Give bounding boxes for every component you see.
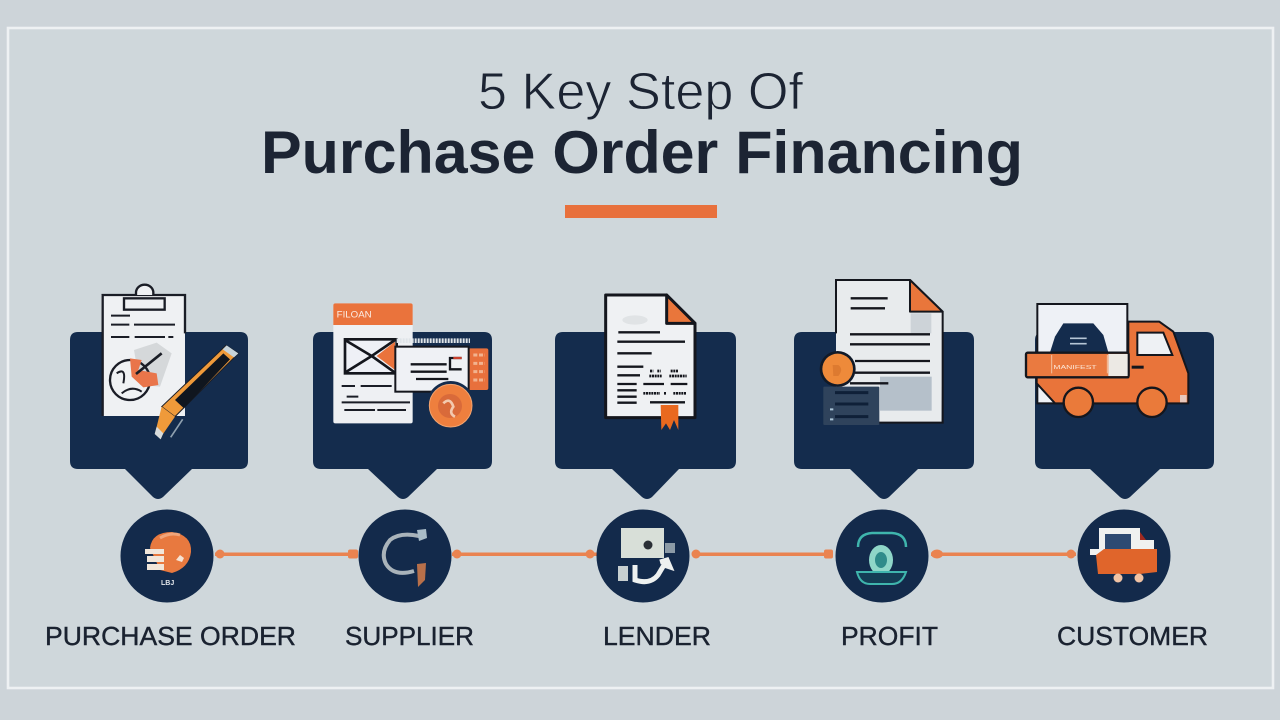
step 1 panel: purchase order (70, 285, 248, 499)
label: customer: CUSTOMER (1057, 621, 1208, 651)
connector line: supplier to lender (452, 550, 597, 558)
connector line: profit to customer (931, 550, 1076, 558)
icon: invoice with envelope and coin (333, 303, 488, 429)
icon: invoice with envelope and coin: FILOAN (337, 310, 372, 320)
icon: signed document with ribbon (606, 295, 695, 430)
callout box 1 (70, 332, 248, 499)
icon: delivery truck (1026, 304, 1188, 417)
callout box 4 (794, 332, 974, 499)
circle icon 5: customer (1078, 510, 1170, 602)
title line: Purchase Order Financing: Purchase Order Financing (261, 119, 1023, 186)
label: lender: LENDER (603, 621, 711, 651)
icon: report with coin (820, 280, 943, 425)
circle icon 1: purchase order: LBJ (161, 580, 174, 587)
title (261, 63, 1023, 186)
callout box 2 (313, 332, 492, 499)
circle icon 1: purchase order (120, 510, 214, 602)
icon: clipboard and pencil (101, 285, 238, 439)
callout box 5 (1035, 332, 1214, 499)
circle icon 2: supplier (358, 510, 452, 602)
icon: delivery truck: MANIFEST (1053, 365, 1097, 371)
connector line: lender to profit (692, 550, 833, 558)
label: supplier: SUPPLIER (345, 621, 474, 651)
step 3 panel: lender (555, 295, 736, 499)
step 2 panel: supplier (313, 303, 492, 499)
step 4 panel: profit (794, 280, 974, 499)
step 5 panel: customer (1026, 304, 1214, 499)
label: purchase order: PURCHASE ORDER (45, 621, 296, 651)
title accent bar (565, 205, 717, 218)
title line: 5 Key Step Of: 5 Key Step Of (478, 63, 804, 121)
connector line: purchase order to supplier (215, 550, 358, 558)
circle icon 3: lender (596, 510, 690, 602)
circle icon 4: profit (836, 510, 928, 602)
callout box 3 (555, 332, 736, 499)
label: profit: PROFIT (841, 621, 938, 651)
